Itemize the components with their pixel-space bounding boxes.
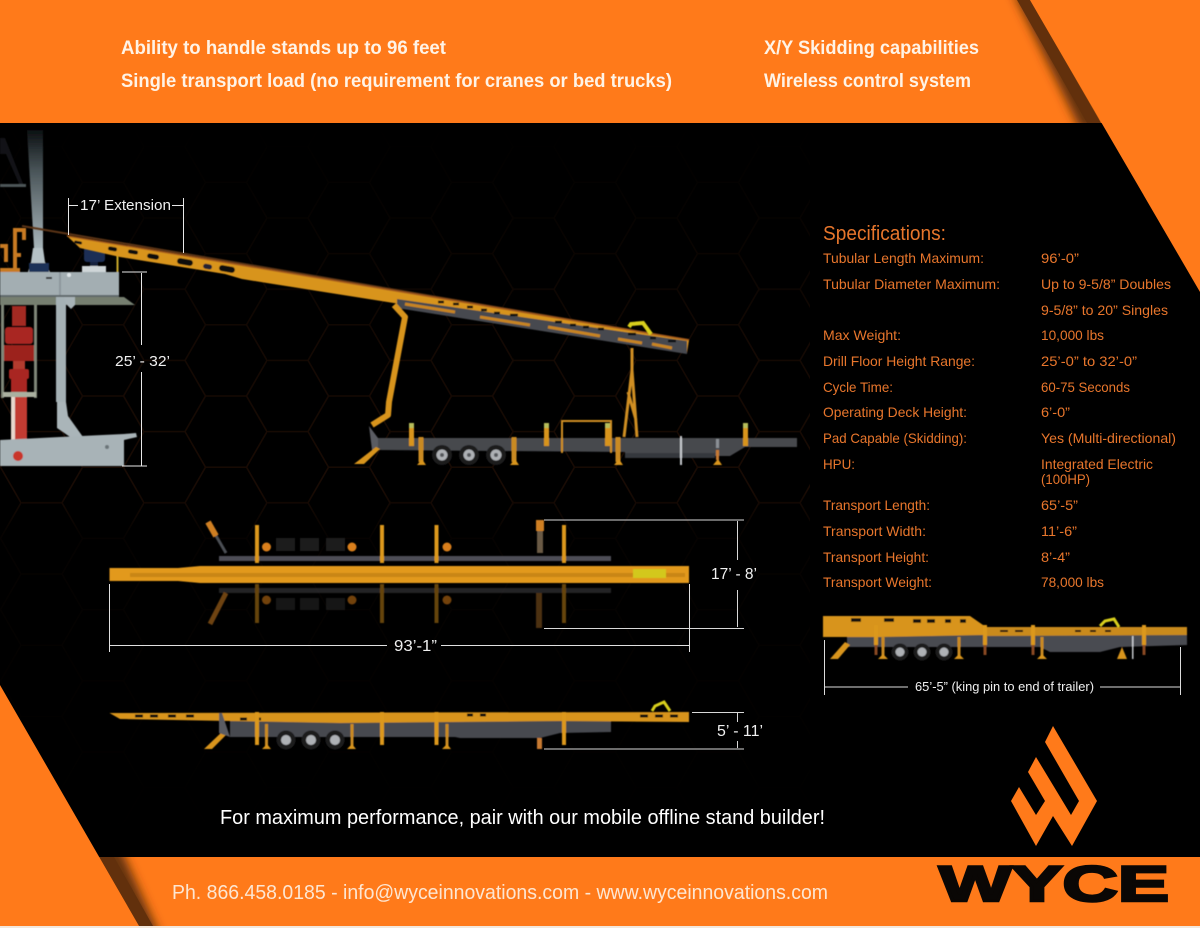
- folded boom: [823, 616, 1187, 637]
- dimension: transport length 65 feet 5 inches: [824, 640, 1180, 695]
- wheels: [276, 730, 344, 750]
- logo mark: [1011, 726, 1097, 846]
- dimension: height 5 feet 11 inches: 5’ - 11’: [717, 723, 763, 740]
- dimension: transport length 65 feet 5 inches: 65’-5” (king pin to end of trailer): [915, 679, 1094, 694]
- trailer body: [230, 721, 611, 738]
- specification labels: Pad Capable (Skidding):: [823, 430, 967, 446]
- dimension: length 93 feet 1 inch: 93’-1”: [394, 638, 437, 655]
- bottom orange band: [99, 857, 1200, 926]
- dimension: width 17 feet 8 inches: 17’ - 8’: [711, 566, 757, 583]
- left corner triangle: [0, 685, 139, 926]
- specifications table: [823, 223, 1176, 590]
- blue drive unit: [82, 247, 106, 272]
- specification labels: Transport Width:: [823, 523, 926, 539]
- header features, left column: [121, 38, 672, 92]
- specification labels: Tubular Diameter Maximum:: [823, 276, 1000, 292]
- dimension: 17 foot extension: 17’ Extension: [80, 197, 171, 214]
- WYCE logo: [939, 726, 1169, 912]
- header features, right column: [764, 38, 979, 92]
- blowout preventer stack: [1, 305, 37, 440]
- specification values: 9-5/8” to 20” Singles: [1041, 302, 1168, 318]
- top orange band: [0, 0, 1110, 133]
- dimension: width 17 feet 8 inches: [544, 520, 757, 628]
- dimension: drill floor height 25 to 32 feet: [115, 272, 170, 466]
- specification values: 78,000 lbs: [1041, 574, 1104, 590]
- specification values: [1041, 250, 1176, 590]
- reflected lower chassis: [210, 584, 611, 628]
- dimension: drill floor height 25 to 32 feet: 25’ - 32’: [115, 353, 170, 370]
- dimension: height 5 feet 11 inches: [544, 712, 763, 749]
- specification labels: Max Weight:: [823, 327, 901, 343]
- right corner triangle: [1030, 0, 1200, 292]
- yellow hook: [652, 702, 670, 711]
- wheels: [432, 445, 506, 465]
- specification labels: Operating Deck Height:: [823, 404, 967, 420]
- orange mast equipment: [0, 230, 24, 270]
- specification values: Up to 9-5/8” Doubles: [1041, 276, 1171, 292]
- specification values: 25’-0” to 32’-0”: [1041, 353, 1137, 369]
- main view: pipe handler deployed: [22, 226, 797, 465]
- safety rail: [562, 421, 611, 453]
- dimension: 17 foot extension: [68, 197, 184, 253]
- transport side view: [110, 702, 689, 750]
- specification values: Yes (Multi-directional): [1041, 430, 1176, 446]
- specification values: Integrated Electric: [1041, 456, 1153, 472]
- drill rig substructure: [0, 130, 137, 466]
- specification values: 60-75 Seconds: [1041, 379, 1130, 395]
- hitch leg: [354, 426, 380, 464]
- under rail: [397, 299, 687, 354]
- lower rig base: [0, 433, 137, 466]
- yellow hook: [1100, 619, 1119, 627]
- specification labels: Tubular Length Maximum:: [823, 250, 984, 266]
- specification labels: Cycle Time:: [823, 379, 893, 395]
- specification values: 11’-6”: [1041, 523, 1077, 539]
- support column: [56, 297, 66, 402]
- upper rig deck: [0, 272, 119, 295]
- specification values: 10,000 lbs: [1041, 327, 1104, 343]
- specification values: 6’-0”: [1041, 404, 1070, 420]
- specification labels: Transport Weight:: [823, 574, 932, 590]
- specification labels: Drill Floor Height Range:: [823, 353, 975, 369]
- trailer body: [847, 635, 1187, 652]
- rig mast: [27, 130, 43, 248]
- specification values: 65’-5”: [1041, 497, 1078, 513]
- plan view: pipe handler from above: [110, 520, 689, 628]
- hitch leg: [830, 642, 850, 659]
- specification labels: HPU:: [823, 456, 855, 472]
- hitch leg: [204, 730, 228, 749]
- logo wordmark: WYCE: [939, 856, 1169, 912]
- contact details: Ph. 866.458.0185 - info@wyceinnovations.com - www.wyceinnovations.com: [172, 882, 828, 904]
- catwalk boom: [22, 226, 689, 353]
- specification labels: [823, 250, 1000, 590]
- outriggers: [257, 712, 564, 749]
- orange boom in plan: [110, 566, 689, 583]
- rear A-frame support: [624, 348, 637, 437]
- outriggers: [876, 625, 1144, 659]
- outriggers and jacks: [409, 423, 748, 465]
- specifications heading: Specifications:: [823, 223, 946, 245]
- header features, right column: X/Y Skidding capabilities: [764, 38, 979, 59]
- upper chassis: [208, 520, 611, 563]
- header features, right column: Wireless control system: [764, 71, 971, 92]
- specification values: 8’-4”: [1041, 549, 1070, 565]
- header features, left column: Ability to handle stands up to 96 feet: [121, 38, 447, 59]
- specification labels: Transport Length:: [823, 497, 930, 513]
- trailer chassis: [377, 436, 797, 465]
- header features, left column: Single transport load (no requirement for cranes or bed trucks): [121, 71, 672, 92]
- folded transport trailer: [823, 616, 1187, 660]
- wheels: [892, 644, 952, 660]
- stand builder callout: For maximum performance, pair with our mobile offline stand builder!: [220, 807, 825, 829]
- specification values: 96’-0”: [1041, 250, 1079, 266]
- front support leg: [372, 305, 405, 425]
- yellow hook: [629, 323, 651, 334]
- specification values: (100HP): [1041, 471, 1090, 487]
- specification labels: Transport Height:: [823, 549, 929, 565]
- yellow deck: [110, 712, 689, 723]
- dimension: length 93 feet 1 inch: [110, 584, 690, 655]
